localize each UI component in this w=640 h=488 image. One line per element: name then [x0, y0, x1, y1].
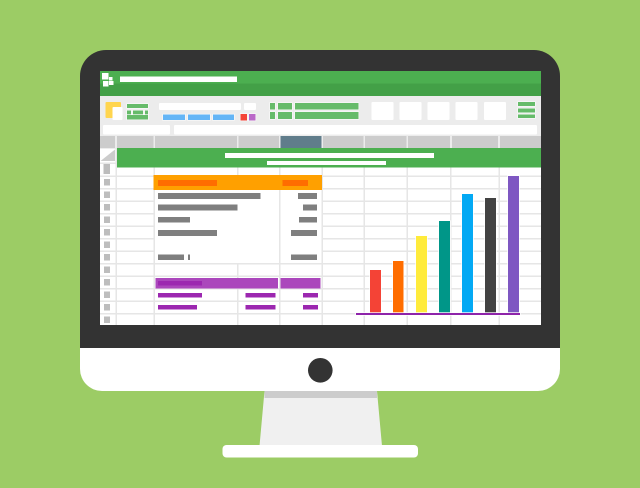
bar: dark grey: [485, 198, 496, 314]
bar: violet: [508, 176, 519, 314]
app title bar: [100, 71, 541, 96]
monitor chin: [80, 340, 560, 391]
bar: yellow: [416, 236, 427, 314]
column headers: [100, 136, 541, 149]
monitor stand: [260, 391, 382, 446]
monitor stand base: [222, 445, 418, 458]
bar chart: [356, 176, 520, 315]
bar: teal: [439, 221, 450, 314]
table: purple section: [156, 278, 320, 310]
grid lines: [100, 148, 541, 325]
bar: red: [370, 270, 381, 314]
chart baseline: [356, 313, 520, 315]
screen: [100, 71, 541, 325]
sheet title band: [117, 148, 541, 168]
table: orange section: [154, 175, 322, 264]
bar: blue: [462, 194, 473, 314]
row headers: [100, 150, 115, 323]
power button: [308, 358, 333, 383]
bar: orange: [393, 261, 404, 314]
toolbar: [100, 96, 541, 136]
monitor bezel: [80, 50, 560, 348]
